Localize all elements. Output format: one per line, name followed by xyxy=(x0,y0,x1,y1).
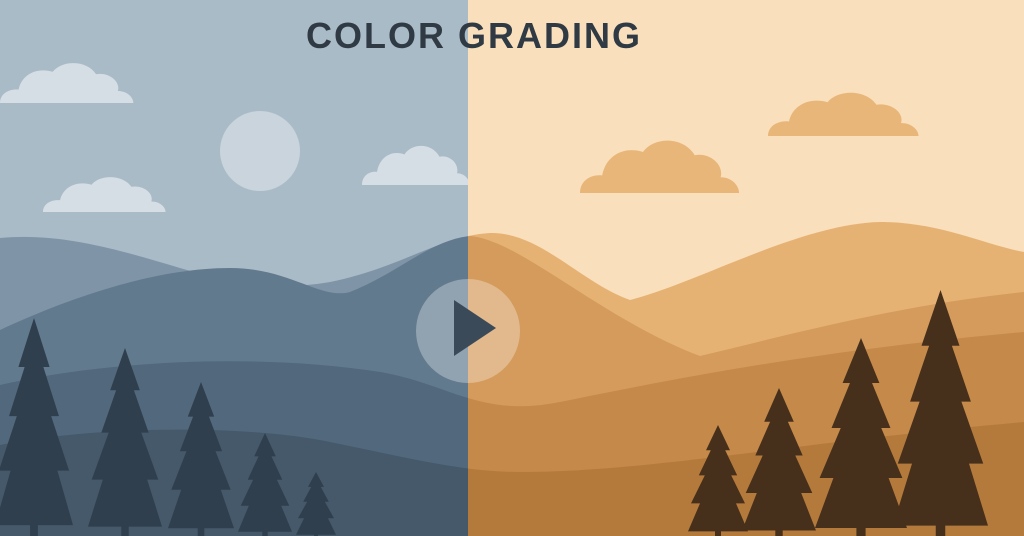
clouds left xyxy=(0,63,470,212)
title: COLOR GRADING xyxy=(306,15,642,56)
icon: sun xyxy=(220,111,300,191)
trees right xyxy=(688,290,988,536)
mountains right xyxy=(468,222,1024,536)
icon: play button xyxy=(416,279,520,383)
panel: left cool grade xyxy=(0,0,468,536)
clouds right xyxy=(580,93,918,193)
panel: right warm grade xyxy=(468,92,1024,536)
trees left xyxy=(0,318,336,536)
mountains left xyxy=(0,236,468,536)
